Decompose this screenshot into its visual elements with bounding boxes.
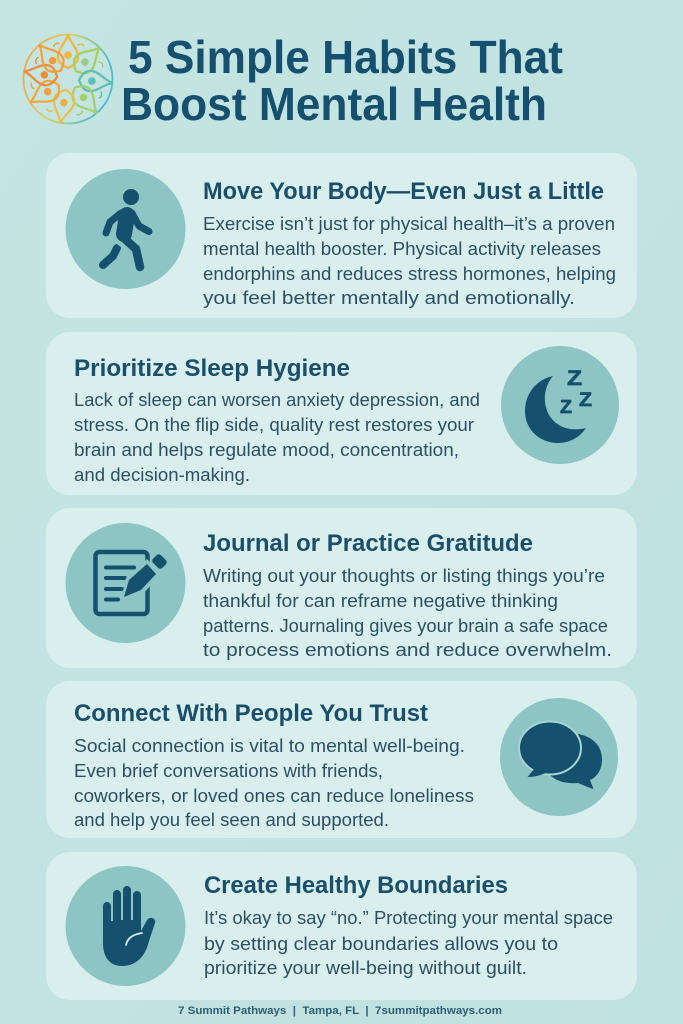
- body text: Social connection is vital to mental well-being.: [74, 736, 465, 756]
- body text: brain and helps regulate mood, concentration,: [74, 440, 459, 460]
- body text: [74, 736, 474, 830]
- body text: [203, 214, 616, 308]
- body text: Writing out your thoughts or listing things you’re: [203, 566, 605, 586]
- icon: moon and z's: Z: [579, 390, 592, 411]
- body text: stress. On the flip side, quality rest restores your: [74, 415, 474, 435]
- icon: raised hand: [66, 866, 186, 986]
- body text: mental health booster. Physical activity releases: [203, 239, 601, 259]
- panel: connect with people you trust: [46, 681, 637, 838]
- heading: Journal or Practice Gratitude: [203, 530, 533, 557]
- body text: [203, 566, 612, 660]
- body text: It’s okay to say “no.” Protecting your mental space: [204, 908, 613, 928]
- heading: Prioritize Sleep Hygiene: [74, 355, 350, 382]
- body text: patterns. Journaling gives your brain a safe space: [203, 616, 608, 636]
- body text: [204, 908, 613, 978]
- body text: Lack of sleep can worsen anxiety depression, and: [74, 390, 480, 410]
- heading: Move Your Body—Even Just a Little: [203, 178, 604, 205]
- body text: and help you feel seen and supported.: [74, 810, 389, 830]
- title: Boost Mental Health: [121, 78, 547, 130]
- heading: Create Healthy Boundaries: [204, 872, 508, 899]
- title: [121, 31, 563, 130]
- body text: and decision-making.: [74, 465, 250, 485]
- body text: thankful for can reframe negative thinking: [203, 591, 558, 611]
- icon: walking person: [66, 169, 186, 289]
- body text: to process emotions and reduce overwhelm.: [203, 640, 612, 660]
- panel: journal or practice gratitude: [46, 508, 637, 668]
- body text: you feel better mentally and emotionally.: [203, 288, 575, 308]
- body text: coworkers, or loved ones can reduce loneliness: [74, 786, 474, 806]
- body text: prioritize your well-being without guilt.: [204, 958, 527, 978]
- logo: mandala: [21, 34, 114, 125]
- icon: moon and z's: [501, 346, 619, 464]
- panel: prioritize sleep hygiene: [46, 332, 637, 495]
- heading: Connect With People You Trust: [74, 700, 428, 727]
- icon: journal and pencil: [66, 523, 186, 643]
- body text: Even brief conversations with friends,: [74, 761, 383, 781]
- body text: Exercise isn’t just for physical health–it’s a proven: [203, 214, 615, 234]
- title: 5 Simple Habits That: [128, 31, 563, 83]
- panel: create healthy boundaries: [46, 852, 637, 1000]
- icon: moon and z's: Z: [560, 397, 572, 417]
- body text: [74, 390, 480, 485]
- icon: moon and z's: Z: [567, 367, 582, 390]
- body text: endorphins and reduces stress hormones, helping: [203, 264, 616, 284]
- body text: by setting clear boundaries allows you to: [204, 934, 558, 954]
- icon: speech bubbles: [500, 698, 618, 816]
- footer: 7 Summit Pathways | Tampa, FL | 7summitpathways.com: [178, 1005, 502, 1017]
- panel: move your body: [46, 153, 637, 318]
